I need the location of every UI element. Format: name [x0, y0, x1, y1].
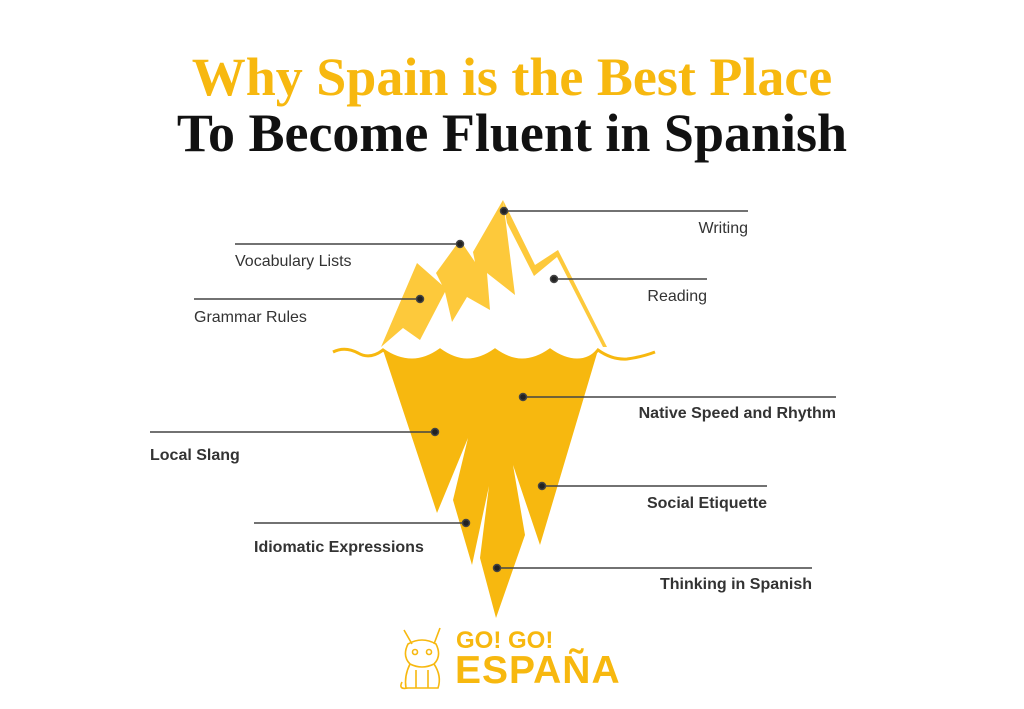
label: Grammar Rules: Grammar Rules	[194, 309, 307, 326]
label: Native Speed and Rhythm: Native Speed and Rhythm	[639, 405, 836, 422]
logo: ESPAÑA	[455, 649, 621, 692]
label: Writing: Writing	[698, 220, 748, 237]
water line	[333, 349, 655, 360]
logo	[400, 627, 621, 692]
leader lines	[150, 208, 836, 572]
label: Reading: Reading	[647, 288, 707, 305]
logo text: GO! GO!	[456, 627, 553, 654]
label: Social Etiquette: Social Etiquette	[647, 495, 767, 512]
title line 1: Why Spain is the Best Place	[192, 47, 832, 107]
icon: lynx	[400, 628, 441, 690]
label: Vocabulary Lists: Vocabulary Lists	[235, 253, 352, 270]
iceberg underwater	[383, 350, 598, 618]
iceberg tip	[381, 200, 607, 347]
label: Idiomatic Expressions: Idiomatic Expressions	[254, 539, 424, 556]
label: Thinking in Spanish: Thinking in Spanish	[660, 576, 812, 593]
label: Local Slang: Local Slang	[150, 447, 240, 464]
title line 2: To Become Fluent in Spanish	[177, 103, 847, 163]
